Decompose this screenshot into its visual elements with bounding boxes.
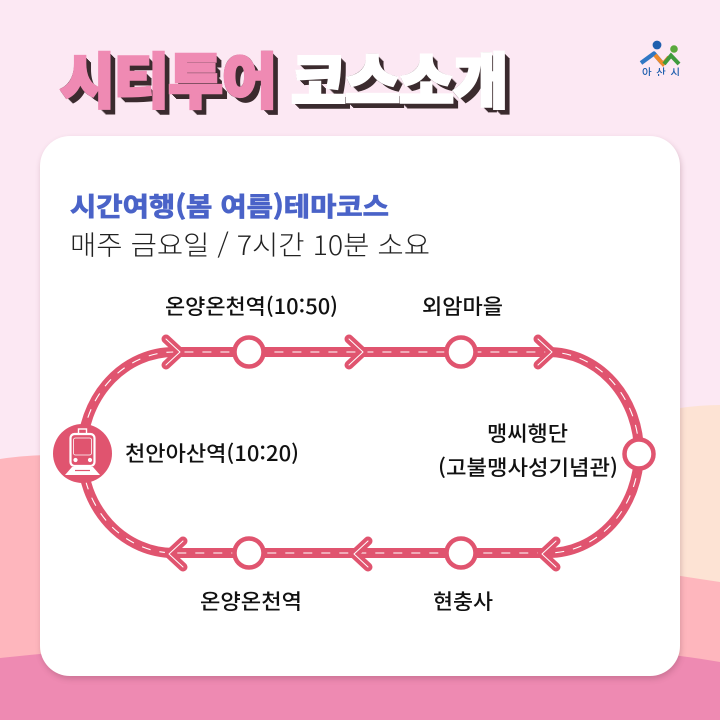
title: 시티투어: 시티투어 [60,34,276,121]
arrows: top, pointing right [166,339,552,365]
label: Onyang Oncheon station: 온양온천역 [200,586,302,616]
label: Onyang Oncheon station 10:50: 온양온천역(10:50) [165,291,338,321]
logo: Asan city [640,40,680,76]
title: 코스소개: 코스소개 [291,34,507,121]
route track [82,352,639,553]
station labels [125,291,618,616]
panel: course card [40,136,680,676]
icon: train at start station [53,424,112,483]
heading: course name: 시간여행(봄 여름)테마코스 [70,187,389,224]
schedule text: 매주 금요일 / 7시간 10분 소요 [70,224,430,263]
label: Hyeonchungsa: 현충사 [433,586,493,616]
label: Cheonan-Asan station 10:20: 천안아산역(10:20) [125,438,299,468]
label: Gobul Maeng Sa-seong memorial: (고불맹사성기념관) [438,452,618,482]
arrows: bottom, pointing left [169,541,556,567]
station markers [234,338,654,568]
label: Oeam village: 외암마을 [422,291,503,321]
label: Maengssi Haengdan: 맹씨행단 [487,418,568,448]
